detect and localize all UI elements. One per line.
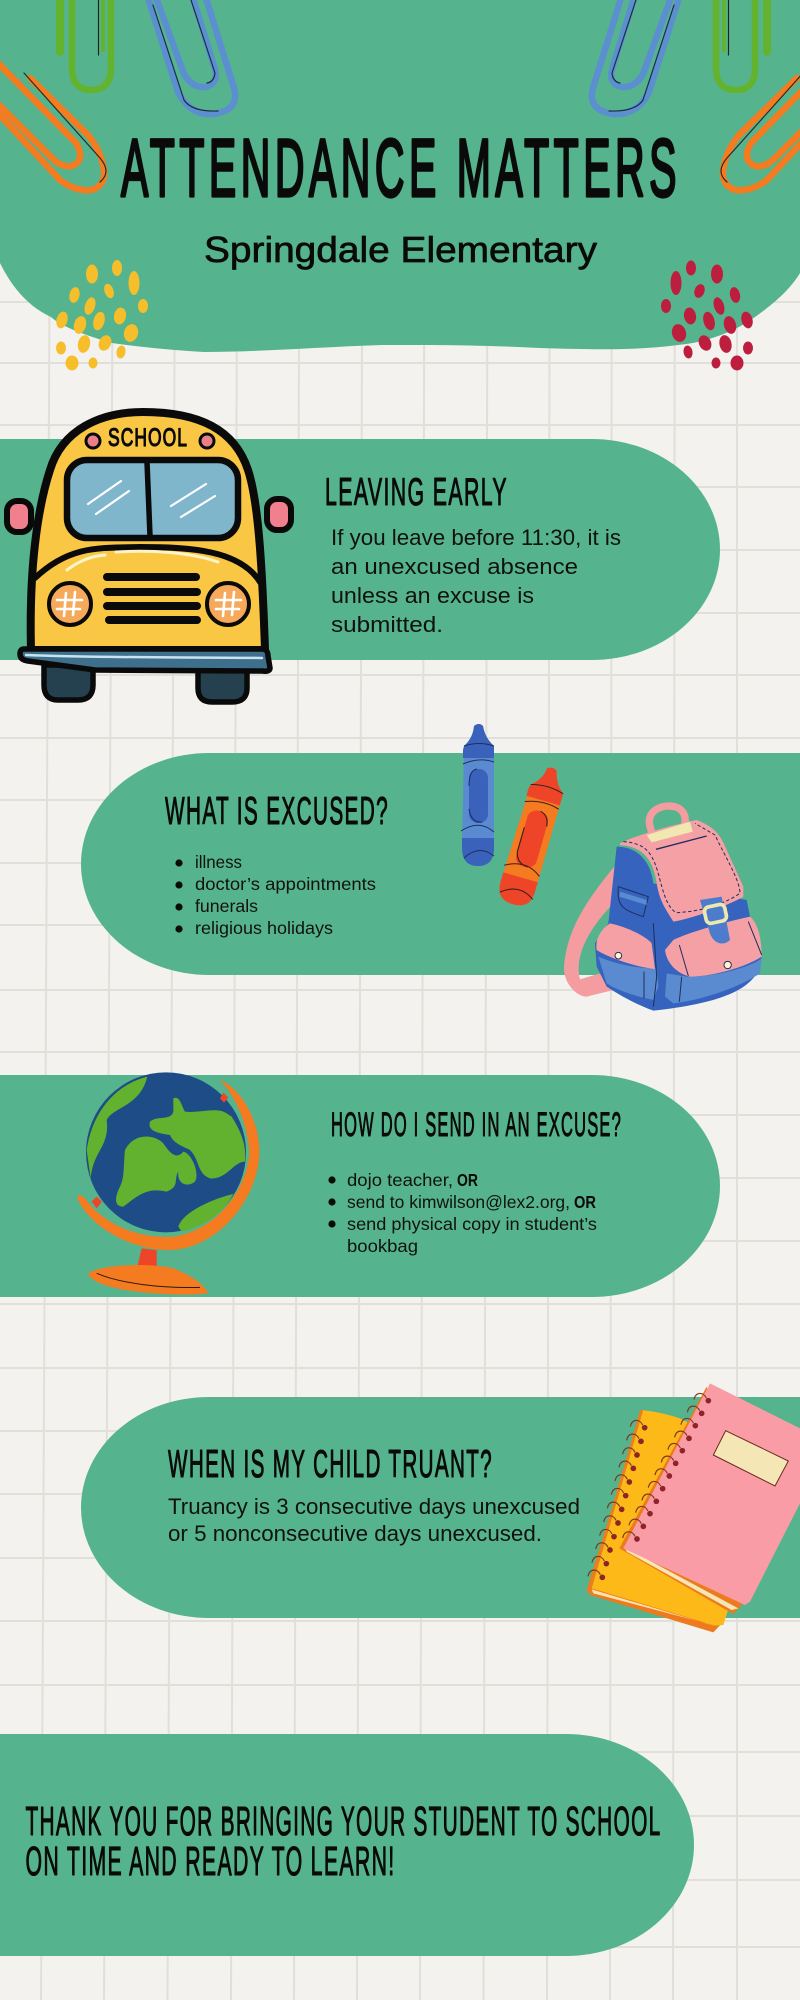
header banner (0, 0, 800, 352)
paperclips right (592, 0, 800, 190)
header wave shape (0, 0, 800, 352)
tires (44, 665, 247, 702)
panel: leaving early (0, 439, 720, 660)
green clip right (716, 0, 767, 90)
body text: unless an excuse is (331, 583, 534, 608)
side pocket (618, 887, 648, 917)
body text (331, 525, 621, 637)
window (67, 460, 238, 538)
bus sign: SCHOOL (108, 424, 188, 452)
panel: truancy (81, 1397, 800, 1618)
bullet list: religious holidays (195, 918, 333, 938)
handle (649, 806, 685, 832)
bullet list: OR (457, 1170, 478, 1190)
bullet list: send to kimwilson@lex2.org, (347, 1192, 570, 1212)
bullet list: dojo teacher, (347, 1170, 453, 1190)
meridian arc (77, 1079, 259, 1250)
right pocket (665, 958, 762, 1003)
base (88, 1265, 208, 1295)
orange clip (0, 62, 106, 190)
bag body (595, 847, 762, 1011)
paperclips left (0, 0, 235, 190)
body text (168, 1494, 580, 1546)
icon: notebooks (587, 1383, 800, 1632)
sphere (86, 1072, 246, 1232)
yellow dot cluster (54, 260, 148, 370)
heading: WHAT IS EXCUSED? (165, 790, 389, 833)
body text: submitted. (331, 612, 443, 637)
icon: school bus (7, 412, 291, 702)
panel shape (0, 439, 720, 660)
bullet list: doctor’s appointments (195, 874, 376, 894)
left pocket (598, 957, 658, 1000)
headlights (49, 583, 249, 625)
blue clip (147, 0, 235, 114)
red dot cluster (661, 260, 755, 370)
pink spiral (623, 1393, 706, 1538)
pink notebook (619, 1383, 800, 1614)
subtitle: Springdale Elementary (204, 229, 597, 270)
notebook label (713, 1431, 788, 1486)
panel shape (0, 1075, 720, 1297)
panel: how do I send an excuse (0, 1075, 720, 1297)
panel: thank you (0, 1734, 694, 1956)
top flap (620, 820, 743, 922)
bullet list (175, 852, 376, 938)
stem (137, 1248, 157, 1272)
side mirrors (7, 499, 291, 532)
bullet list: send physical copy in student’s (347, 1214, 597, 1234)
panel: what is excused (81, 753, 800, 975)
icon: globe (77, 1072, 259, 1295)
roof lights (86, 434, 214, 448)
green clip (60, 0, 111, 90)
panel shape (81, 753, 800, 975)
orange clip right (721, 62, 800, 190)
icon: orange crayon (494, 762, 569, 909)
panel shape (81, 1397, 800, 1618)
axis pins (92, 1093, 228, 1208)
icon: backpack (564, 806, 762, 1011)
grille (107, 577, 197, 620)
hood (35, 547, 260, 582)
closing message: ON TIME AND READY TO LEARN! (26, 1838, 396, 1884)
body text: an unexcused absence (331, 554, 578, 579)
yellow notebook (587, 1410, 773, 1632)
blue clip right (592, 0, 680, 114)
bullet list: funerals (195, 896, 258, 916)
bullet list: illness (195, 852, 242, 872)
heading: LEAVING EARLY (325, 471, 508, 514)
panel shape (0, 1734, 694, 1956)
bullet list: OR (574, 1192, 596, 1212)
bullet list: bookbag (347, 1236, 418, 1256)
body text: Truancy is 3 consecutive days unexcused (168, 1494, 580, 1519)
strap (564, 867, 617, 997)
bullet list (328, 1170, 597, 1256)
bus body (31, 412, 265, 650)
body text: or 5 nonconsecutive days unexcused. (168, 1521, 542, 1546)
closing message (26, 1798, 662, 1884)
heading: WHEN IS MY CHILD TRUANT? (168, 1443, 493, 1486)
yellow spiral (588, 1420, 643, 1576)
bumper (20, 649, 270, 671)
icon: blue crayon (461, 724, 494, 866)
continents (87, 1077, 245, 1232)
body text: If you leave before 11:30, it is (331, 525, 621, 550)
buckle (700, 897, 730, 943)
